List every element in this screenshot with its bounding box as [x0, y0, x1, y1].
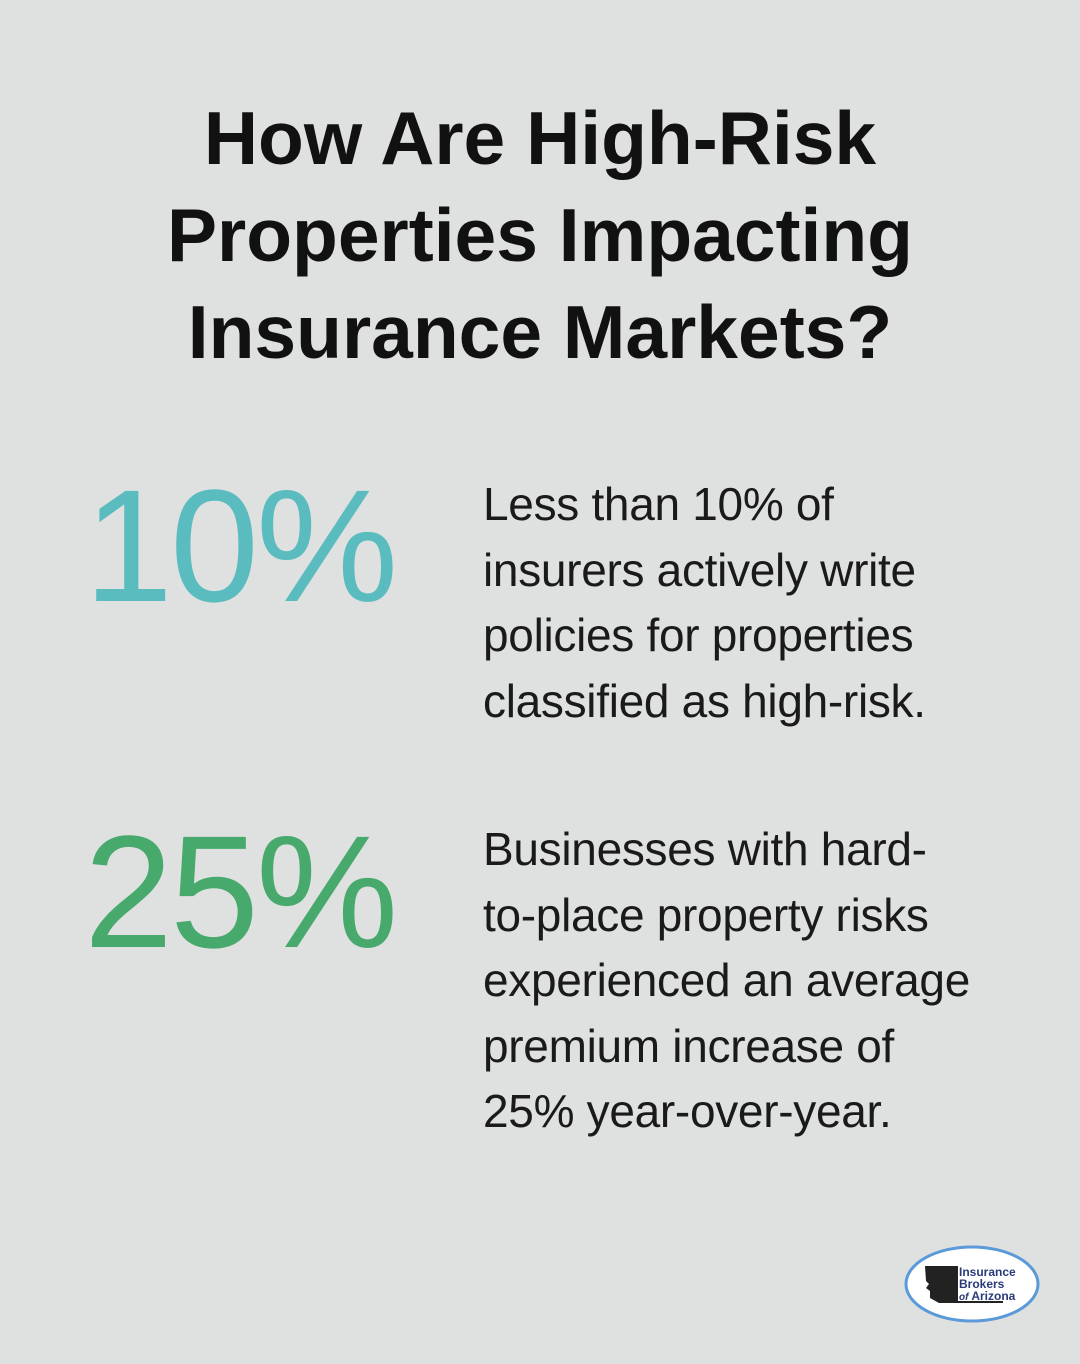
- title: Insurance Markets?: [188, 290, 892, 374]
- stat 2 text: [483, 823, 970, 1137]
- stat 2 number: 25%: [84, 802, 395, 981]
- stat 2 text: experienced an average: [483, 954, 970, 1006]
- stat 2 text: premium increase of: [483, 1020, 894, 1072]
- stat 1 text: insurers actively write: [483, 544, 916, 596]
- logo: of Arizona: [959, 1289, 1016, 1303]
- logo: [904, 1246, 1040, 1322]
- title: [167, 96, 913, 374]
- title: How Are High-Risk: [204, 96, 876, 180]
- stat 2 text: Businesses with hard-: [483, 823, 927, 875]
- stat 1 number: 10%: [84, 456, 395, 635]
- logo: Brokers: [959, 1277, 1005, 1291]
- stat 1 text: policies for properties: [483, 609, 913, 661]
- title: Properties Impacting: [167, 193, 913, 277]
- stat 1 text: [483, 478, 926, 726]
- stat 1 text: classified as high-risk.: [483, 674, 926, 726]
- stat 2 text: 25% year-over-year.: [483, 1085, 891, 1137]
- logo: Insurance: [959, 1265, 1016, 1279]
- stat 1 text: Less than 10% of: [483, 478, 834, 530]
- stat 2 text: to-place property risks: [483, 888, 929, 940]
